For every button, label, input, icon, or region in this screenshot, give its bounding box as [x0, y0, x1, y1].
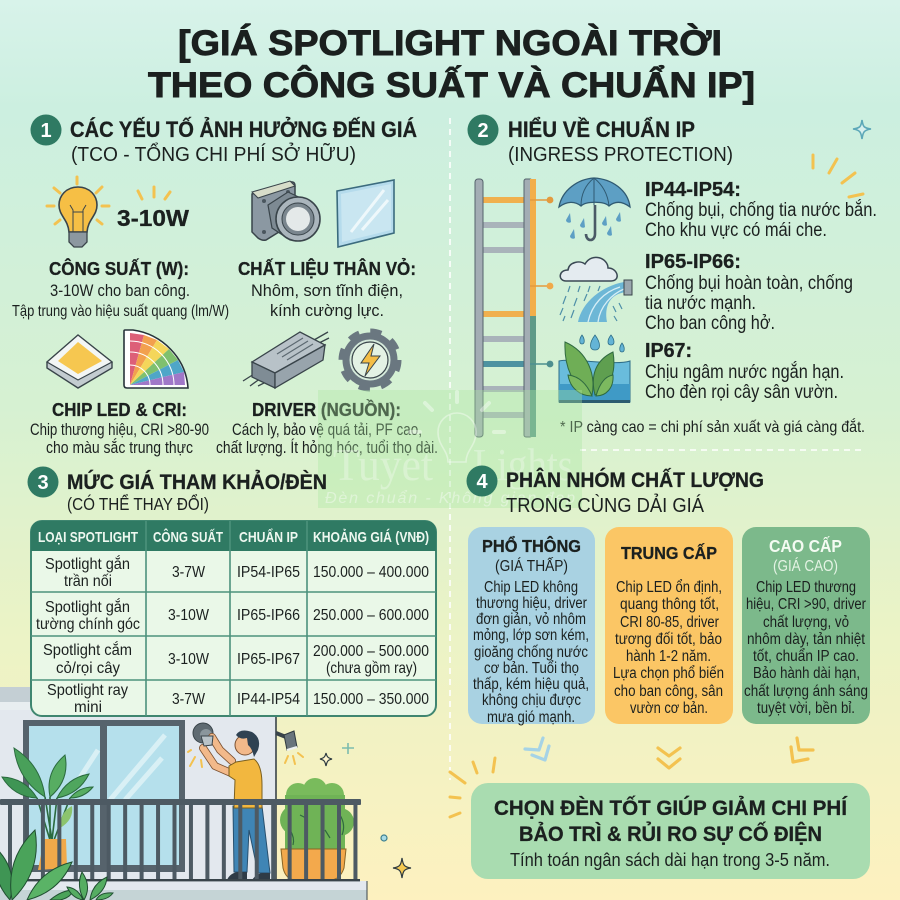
price table: [31, 521, 436, 716]
icon: gear with lightning: [342, 332, 398, 388]
card: cao cấp: CAO CẤP: [769, 535, 842, 556]
panel: hiểu về chuẩn IP: [468, 114, 877, 437]
title: [GIÁ SPOTLIGHT NGOÀI TRỜI: [178, 23, 722, 63]
block: IP44-IP54: [645, 179, 877, 241]
callout: Tính toán ngân sách dài hạn trong 3-5 năm.: [510, 850, 830, 870]
block: công suất: 3-10W cho ban công.: [50, 281, 190, 300]
decorative sparkles: [320, 743, 411, 878]
card: cao cấp: hiệu, CRI >90, driver: [746, 596, 866, 613]
card: cao cấp: tốt, chuẩn IP cao.: [753, 648, 859, 665]
table row 2: 3-10W: [168, 607, 210, 624]
table row 3: 3-10W: [168, 651, 210, 668]
icon: umbrella with rain: [559, 178, 630, 240]
section 2 heading: (INGRESS PROTECTION): [508, 144, 733, 166]
table row 4: 3-7W: [172, 691, 206, 708]
table row 2: IP65-IP66: [237, 607, 300, 624]
chart: IP ladder: [475, 179, 553, 437]
card: trung cấp: Chip LED ổn định,: [616, 579, 722, 596]
card: phổ thông: PHỔ THÔNG: [482, 535, 581, 556]
table row 4: 150.000 – 350.000: [313, 691, 429, 708]
card: trung cấp: vườn cơ bản.: [630, 700, 708, 717]
callout: [471, 783, 870, 879]
section 1 heading: (TCO - TỔNG CHI PHÍ SỞ HỮU): [71, 142, 356, 166]
card: cao cấp: (GIÁ CAO): [773, 558, 838, 575]
section 2 number badge: 2: [477, 120, 489, 142]
title: [148, 23, 755, 105]
card: trung cấp: quang thông tốt,: [620, 596, 719, 613]
icon: cloud and water jet: [560, 257, 632, 322]
card: trung cấp: TRUNG CẤP: [621, 542, 717, 563]
card: phổ thông: (GIÁ THẤP): [495, 558, 568, 575]
card: phổ thông: thương hiệu, driver: [476, 595, 587, 612]
block: IP65-IP66: [645, 251, 853, 334]
section 3 number badge: [28, 466, 58, 498]
table header: [38, 528, 429, 546]
railing: [0, 799, 361, 881]
table header: KHOẢNG GIÁ (VNĐ): [313, 529, 429, 546]
table row 3: 200.000 – 500.000: [313, 643, 429, 660]
card: trung cấp: [605, 527, 733, 724]
block: chip LED & CRI: Chip thương hiệu, CRI >80-90: [30, 421, 209, 439]
section 4 heading: [506, 467, 764, 517]
table row 1: 3-7W: [172, 564, 206, 581]
card: cao cấp: nhôm dày, tản nhiệt: [747, 631, 866, 648]
table header: CÔNG SUẤT: [153, 528, 223, 546]
title: THEO CÔNG SUẤT VÀ CHUẨN IP]: [148, 65, 755, 105]
section 4 heading: TRONG CÙNG DẢI GIÁ: [506, 494, 704, 517]
arrow: orange chevrons: [658, 748, 680, 768]
icon: tempered glass: [337, 180, 394, 247]
card: phổ thông: gioăng chống nước: [474, 644, 588, 661]
table row 1: IP54-IP65: [237, 564, 300, 581]
table row 3: (chưa gồm ray): [326, 660, 417, 677]
table row 4: Spotlight ray: [47, 682, 128, 699]
footnote: * IP càng cao = chi phí sản xuất và giá càng đắt.: [560, 417, 865, 436]
watermark: Tuyet: [333, 439, 433, 490]
block: công suất: Tập trung vào hiệu suất quang (lm/W): [12, 303, 229, 320]
card: phổ thông: đơn giản, vỏ nhôm: [476, 611, 586, 628]
card: phổ thông: mưa gió mạnh.: [487, 709, 575, 726]
block: driver: chất lượng. Ít hỏng hóc, tuổi thọ dài.: [216, 438, 438, 457]
building wall: [0, 687, 276, 885]
wall lamp: [276, 731, 303, 764]
table row 4: mini: [74, 699, 102, 716]
table row 2: tường chính góc: [36, 616, 140, 633]
block: IP67: [645, 340, 844, 403]
block: IP44-IP54: IP44-IP54:: [645, 179, 741, 201]
block: công suất: CÔNG SUẤT (W):: [49, 258, 189, 279]
block: IP67: Chịu ngâm nước ngắn hạn.: [645, 361, 844, 383]
card: phổ thông: cơ bản. Tuổi thọ: [484, 660, 579, 677]
watermark: Đèn chuẩn - Không gian đẹp: [325, 489, 575, 507]
icon: spotlight housing: [252, 181, 320, 241]
section 4 number badge: [466, 466, 498, 496]
section 2 heading: [508, 117, 733, 166]
block: công suất: [12, 258, 229, 320]
table row 1: 150.000 – 400.000: [313, 564, 429, 581]
table row 4: [47, 682, 429, 716]
section 1 number badge: 1: [40, 120, 52, 142]
section 4 number badge: 4: [476, 471, 488, 493]
table header: CHUẨN IP: [239, 528, 298, 546]
icon: colour fan: [124, 330, 188, 388]
card: cao cấp: Bảo hành dài hạn,: [753, 665, 860, 682]
panel: phân nhóm chất lượng: [450, 466, 870, 879]
table header: LOẠI SPOTLIGHT: [38, 529, 138, 546]
block: chất liệu thân vỏ: kính cường lực.: [270, 301, 384, 320]
section 2 number badge: [468, 114, 498, 146]
block: IP44-IP54: Cho khu vực có mái che.: [645, 220, 827, 241]
card: cao cấp: Chip LED thương: [756, 579, 856, 596]
block: driver: DRIVER (NGUỒN):: [252, 399, 401, 420]
block: chất liệu thân vỏ: Nhôm, sơn tĩnh điện,: [251, 281, 403, 300]
card: cao cấp: chất lượng ánh sáng: [744, 683, 868, 700]
panel: mức giá tham khảo: [28, 466, 327, 514]
plant behind railing: [2, 748, 93, 870]
panel: yếu tố ảnh hưởng đến giá: [12, 114, 438, 457]
block: IP65-IP66: IP65-IP66:: [645, 251, 741, 273]
section 2 heading: HIỂU VỀ CHUẨN IP: [508, 117, 695, 142]
table row 3: IP65-IP67: [237, 651, 300, 668]
card: cao cấp: [742, 527, 870, 724]
icon: light bulb: [47, 177, 170, 247]
table row 3: [43, 640, 429, 677]
section 1 heading: CÁC YẾU TỐ ẢNH HƯỞNG ĐẾN GIÁ: [70, 116, 417, 142]
block: IP65-IP66: tia nước mạnh.: [645, 293, 756, 314]
card: cao cấp: chất lượng, vỏ: [763, 614, 849, 631]
balcony slab: [0, 881, 367, 900]
table row 4: IP44-IP54: [237, 691, 300, 708]
bush in orange pot: [280, 778, 354, 880]
card: trung cấp: Lựa chọn phổ biến: [613, 665, 724, 682]
callout: BẢO TRÌ & RỦI RO SỰ CỐ ĐIỆN: [519, 820, 822, 846]
wattage label: 3-10W: [117, 205, 189, 231]
block: chất liệu thân vỏ: CHẤT LIỆU THÂN VỎ:: [238, 258, 416, 279]
section 3 heading: [67, 469, 327, 514]
icon: plant in water: [559, 335, 630, 403]
balcony illustration: [0, 687, 411, 900]
table row 3: Spotlight cắm: [43, 640, 132, 659]
section 3 heading: MỨC GIÁ THAM KHẢO/ĐÈN: [67, 469, 327, 494]
table row 2: 250.000 – 600.000: [313, 607, 429, 624]
icon: LED driver: [243, 332, 329, 388]
block: driver: [216, 399, 438, 457]
table row 2: Spotlight gắn: [45, 597, 130, 616]
card: trung cấp: tương đối tốt, bảo: [615, 631, 722, 648]
block: chất liệu thân vỏ: [238, 258, 416, 320]
watermark: Lights: [473, 439, 573, 490]
card: cao cấp: tuyệt vời, bền bỉ.: [757, 700, 855, 717]
card: trung cấp: CRI 80-85, driver: [620, 614, 719, 631]
section 1 heading: [70, 116, 417, 166]
table row 2: [36, 597, 429, 633]
section 1 number badge: [30, 114, 62, 146]
icon: callout sparkle rays: [450, 758, 495, 817]
card: trung cấp: cho ban công, sân: [614, 683, 723, 700]
card: phổ thông: Chip LED không: [484, 579, 578, 596]
icon: sparkle rays: [813, 120, 871, 197]
card: phổ thông: [468, 527, 595, 726]
watermark: [318, 390, 582, 508]
callout: CHỌN ĐÈN TỐT GIÚP GIẢM CHI PHÍ: [494, 794, 848, 820]
foreground leaves: [0, 830, 113, 900]
block: IP67: IP67:: [645, 340, 692, 362]
table row 3: cỏ/rọi cây: [56, 660, 120, 677]
table row 1: Spotlight gắn: [45, 554, 130, 573]
block: IP65-IP66: Cho ban công hở.: [645, 313, 775, 334]
block: IP67: Cho đèn rọi cây sân vườn.: [645, 382, 838, 403]
icon: LED chip: [47, 335, 112, 388]
table row 1: trần nối: [64, 573, 112, 590]
arrow: blue chevrons: [525, 738, 549, 760]
arrow: yellow chevrons: [791, 738, 813, 762]
block: chip LED & CRI: [30, 400, 209, 457]
card: phổ thông: thấp, kém hiệu quả,: [473, 676, 589, 693]
block: chip LED & CRI: CHIP LED & CRI:: [52, 400, 187, 420]
block: IP65-IP66: Chống bụi hoàn toàn, chống: [645, 273, 853, 294]
card: trung cấp: hành 1-2 năm.: [626, 648, 711, 665]
block: driver: Cách ly, bảo vệ quá tải, PF cao,: [232, 421, 422, 439]
block: chip LED & CRI: cho màu sắc trung thực: [46, 438, 193, 457]
section 3 number badge: 3: [37, 472, 49, 494]
card: phổ thông: không chịu được: [482, 692, 581, 709]
section 3 heading: (CÓ THỂ THAY ĐỔI): [67, 493, 209, 514]
card: phổ thông: mỏng, lớp sơn kém,: [473, 627, 589, 644]
person installing a spotlight: [188, 723, 270, 880]
table row 1: [45, 554, 429, 590]
window: [23, 720, 185, 872]
section 4 heading: PHÂN NHÓM CHẤT LƯỢNG: [506, 467, 764, 492]
